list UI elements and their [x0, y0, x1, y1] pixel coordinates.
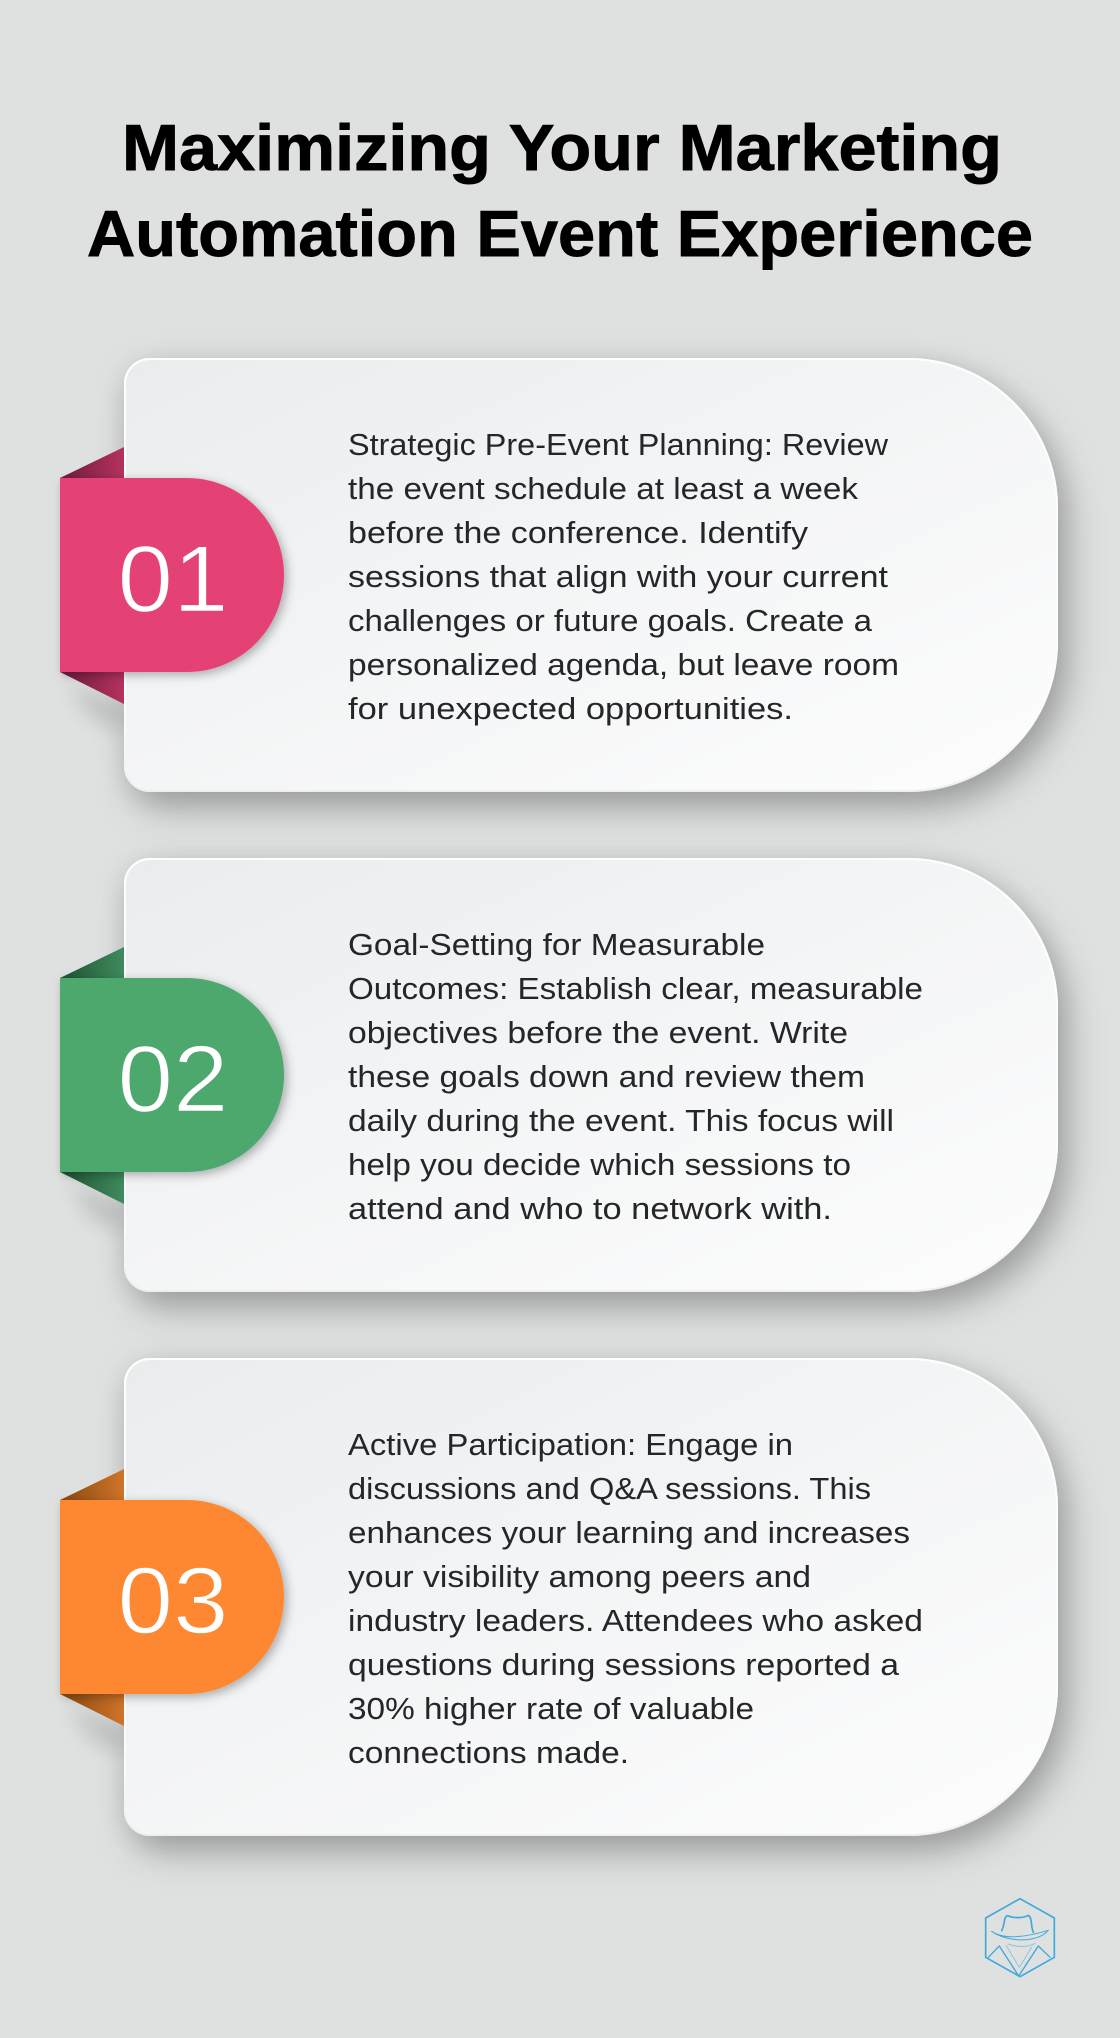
text block 03: your visibility among peers and [348, 1559, 811, 1594]
card 01 [125, 359, 1057, 791]
number badge 03 [60, 1500, 284, 1694]
ribbon folds 01 [60, 447, 124, 704]
text block 01: the event schedule at least a week [348, 471, 859, 506]
text block 02: these goals down and review them [348, 1059, 865, 1094]
panel: step 01 strategic pre-event planning [60, 359, 1057, 791]
text block 02: attend and who to network with. [348, 1191, 832, 1226]
text block 03: 30% higher rate of valuable [348, 1691, 754, 1726]
panel: step 02 goal-setting [60, 859, 1057, 1291]
title: Automation Event Experience [87, 197, 1033, 270]
title [87, 111, 1033, 270]
title: Maximizing Your Marketing [122, 111, 1002, 184]
card 03 [125, 1359, 1057, 1835]
text block 02: objectives before the event. Write [348, 1015, 848, 1050]
text block 02 [348, 927, 923, 1226]
text block 03: discussions and Q&A sessions. This [348, 1471, 871, 1506]
text block 01: Strategic Pre-Event Planning: Review [348, 427, 889, 462]
text block 01: for unexpected opportunities. [348, 691, 793, 726]
text block 03: connections made. [348, 1735, 629, 1770]
text block 03: Active Participation: Engage in [348, 1427, 793, 1462]
text block 03: enhances your learning and increases [348, 1515, 910, 1550]
text block 02: Outcomes: Establish clear, measurable [348, 971, 923, 1006]
text block 03: industry leaders. Attendees who asked [348, 1603, 923, 1638]
ribbon folds 03 [60, 1469, 124, 1726]
ribbon folds 02 [60, 947, 124, 1204]
number badge 01 [60, 478, 284, 672]
icon: hexagon spy logo [986, 1899, 1054, 1977]
text block 01: challenges or future goals. Create a [348, 603, 873, 638]
text block 01: sessions that align with your current [348, 559, 888, 594]
text block 01: personalized agenda, but leave room [348, 647, 899, 682]
text block 02: daily during the event. This focus will [348, 1103, 894, 1138]
text block 02: Goal-Setting for Measurable [348, 927, 765, 962]
panel: step 03 active participation [60, 1359, 1057, 1835]
number badge 01: 01 [118, 526, 228, 632]
number badge 02: 02 [118, 1026, 228, 1132]
text block 03: questions during sessions reported a [348, 1647, 900, 1682]
text block 01 [348, 427, 899, 726]
text block 03 [348, 1427, 923, 1770]
card 02 [125, 859, 1057, 1291]
number badge 02 [60, 978, 284, 1172]
text block 02: help you decide which sessions to [348, 1147, 851, 1182]
text block 01: before the conference. Identify [348, 515, 809, 550]
number badge 03: 03 [118, 1548, 228, 1654]
